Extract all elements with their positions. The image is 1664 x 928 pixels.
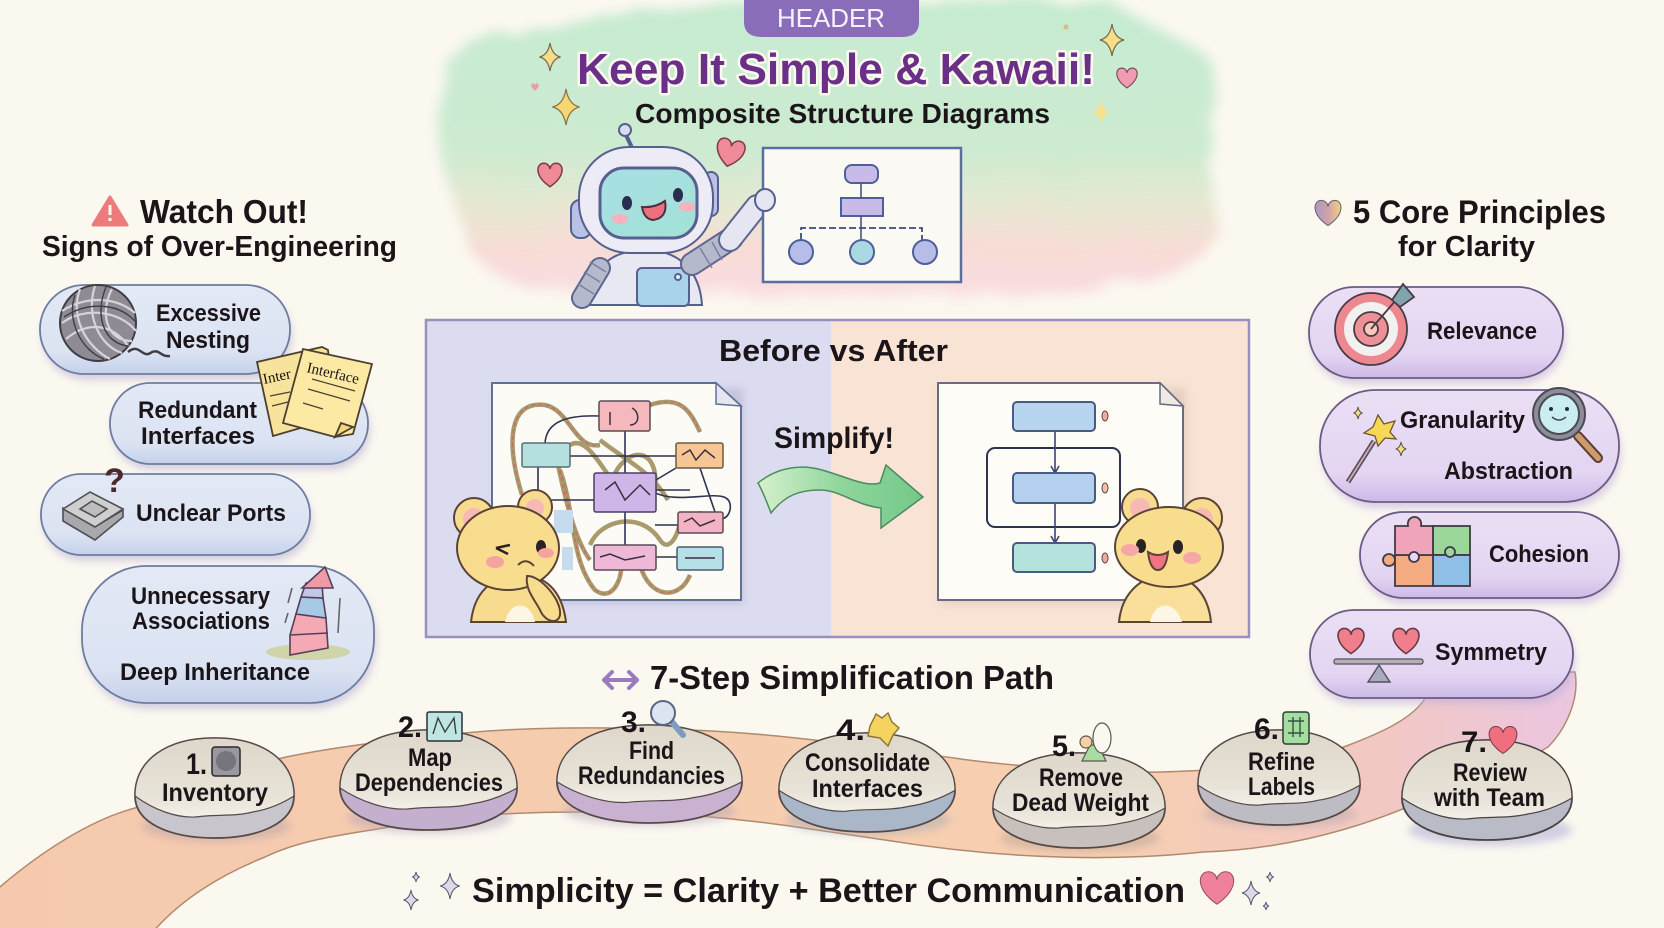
- title: Keep It Simple & Kawaii!: [577, 45, 1095, 94]
- icon: wobbly tower: [266, 567, 350, 660]
- label: Unnecessary: [131, 583, 271, 610]
- icon: sticky notes: Inter: [262, 366, 293, 388]
- label: Redundant: [138, 397, 257, 424]
- label: Review: [1453, 759, 1527, 787]
- icon: heart: [1489, 726, 1517, 754]
- label: Find: [629, 737, 674, 765]
- subheading line: Signs of Over-Engineering: [42, 231, 397, 263]
- icon: double arrow: [604, 672, 637, 688]
- icon: multicolour heart: [1315, 200, 1341, 226]
- icon: sticky notes: [257, 347, 372, 437]
- step 1: inventory: [135, 738, 294, 842]
- subtitle: Composite Structure Diagrams: [635, 98, 1050, 129]
- label: Map: [408, 744, 452, 772]
- icon: puzzle piece: [868, 713, 899, 746]
- panel: cohesion: [1360, 512, 1621, 604]
- icon: smiling magnifier: [1533, 388, 1598, 458]
- icon: port block: [63, 492, 123, 540]
- icon: warning triangle: [93, 197, 127, 225]
- panel: unnecessary associations and deep inheritance: [82, 566, 376, 709]
- icon: label card: [1283, 712, 1309, 744]
- icon: question mark: ?: [104, 462, 125, 500]
- label: with Team: [1433, 784, 1545, 812]
- icon: hearts by robot: [538, 137, 746, 187]
- panel: symmetry: [1310, 610, 1575, 704]
- tagline text: Simplicity = Clarity + Better Communication: [472, 872, 1185, 910]
- step 6: refine labels: 6.: [1254, 713, 1279, 746]
- label: Interfaces: [812, 775, 923, 803]
- icon: weight with balloon: [1080, 723, 1111, 761]
- label: Deep Inheritance: [120, 659, 310, 686]
- step 2: map dependencies: [340, 711, 517, 834]
- heading line: Watch Out!: [140, 193, 308, 230]
- icon: sticky notes: Interface: [305, 360, 361, 388]
- footer tagline: [404, 872, 1274, 910]
- simplify label: Simplify!: [774, 422, 894, 455]
- heading: core principles: [1315, 194, 1606, 263]
- subheading line: for Clarity: [1398, 231, 1535, 263]
- sad bear: [454, 490, 566, 622]
- step 4: consolidate interfaces: [779, 713, 955, 835]
- step 1: inventory: 1.: [186, 748, 207, 781]
- panel: relevance: [1309, 284, 1565, 384]
- header tag: HEADER: [777, 3, 885, 33]
- icon: chart card: [427, 712, 462, 741]
- label: Labels: [1248, 773, 1315, 801]
- panel: redundant interfaces: [110, 347, 372, 470]
- label: Redundancies: [578, 762, 725, 790]
- label: Inventory: [162, 779, 268, 807]
- heading: seven step path: [604, 659, 1054, 696]
- simplify arrow: [758, 465, 923, 528]
- label: Dependencies: [355, 769, 503, 797]
- label: Nesting: [166, 327, 250, 354]
- label: Excessive: [156, 300, 261, 327]
- step 7: review with team: [1402, 726, 1572, 846]
- step 3: find redundancies: 3.: [621, 706, 646, 739]
- heading: watch out: [42, 193, 397, 263]
- step 5: remove dead weight: 5.: [1052, 730, 1076, 763]
- label: Interfaces: [141, 423, 255, 450]
- panel: excessive nesting: [40, 285, 292, 380]
- step 5: remove dead weight: [993, 723, 1165, 852]
- icon: jigsaw puzzle: [1383, 517, 1470, 586]
- header tag: [744, 0, 919, 37]
- icon: balance with hearts: [1334, 628, 1423, 682]
- panel: unclear ports: [41, 462, 312, 561]
- label: Symmetry: [1435, 639, 1548, 666]
- messy document: [492, 383, 744, 604]
- label: Associations: [132, 608, 270, 635]
- step 6: refine labels: [1198, 712, 1360, 828]
- icon: magic wand: [1348, 407, 1406, 482]
- label: Cohesion: [1489, 541, 1589, 568]
- icon: target: [1335, 284, 1414, 365]
- heading line: 5 Core Principles: [1353, 194, 1606, 230]
- label: Relevance: [1427, 318, 1537, 345]
- step 7: review with team: 7.: [1461, 726, 1487, 759]
- label: Consolidate: [805, 749, 930, 777]
- panel: before vs after: [426, 320, 1249, 637]
- step 3: find redundancies: [557, 701, 742, 826]
- heading text: 7-Step Simplification Path: [650, 659, 1054, 696]
- watercolor header wash: [436, 0, 1221, 301]
- label: Remove: [1039, 764, 1123, 792]
- board with mini diagram: [755, 148, 961, 282]
- label: Refine: [1248, 748, 1315, 776]
- icon: yarn ball: [60, 285, 170, 361]
- label: Unclear Ports: [136, 500, 286, 527]
- happy bear: [1115, 489, 1223, 622]
- icon: heart: [1200, 872, 1234, 904]
- icon: left sparkles: [404, 872, 460, 910]
- label: Granularity: [1400, 407, 1526, 434]
- panel heading: Before vs After: [719, 333, 948, 368]
- decorative sparkles and hearts around title: [531, 24, 1137, 125]
- label: Abstraction: [1444, 458, 1573, 485]
- icon: right sparkles: [1242, 872, 1274, 910]
- panel: granularity and abstraction: [1320, 388, 1621, 508]
- path: winding road: [0, 672, 1576, 928]
- icon: magnifier: [651, 701, 683, 735]
- icon: yarn thumbnail: [212, 747, 240, 776]
- step 2: map dependencies: 2.: [398, 711, 422, 744]
- step 4: consolidate interfaces: 4.: [836, 714, 865, 747]
- clean document: [938, 383, 1186, 604]
- robot mascot: [571, 124, 757, 306]
- label: Dead Weight: [1012, 789, 1150, 817]
